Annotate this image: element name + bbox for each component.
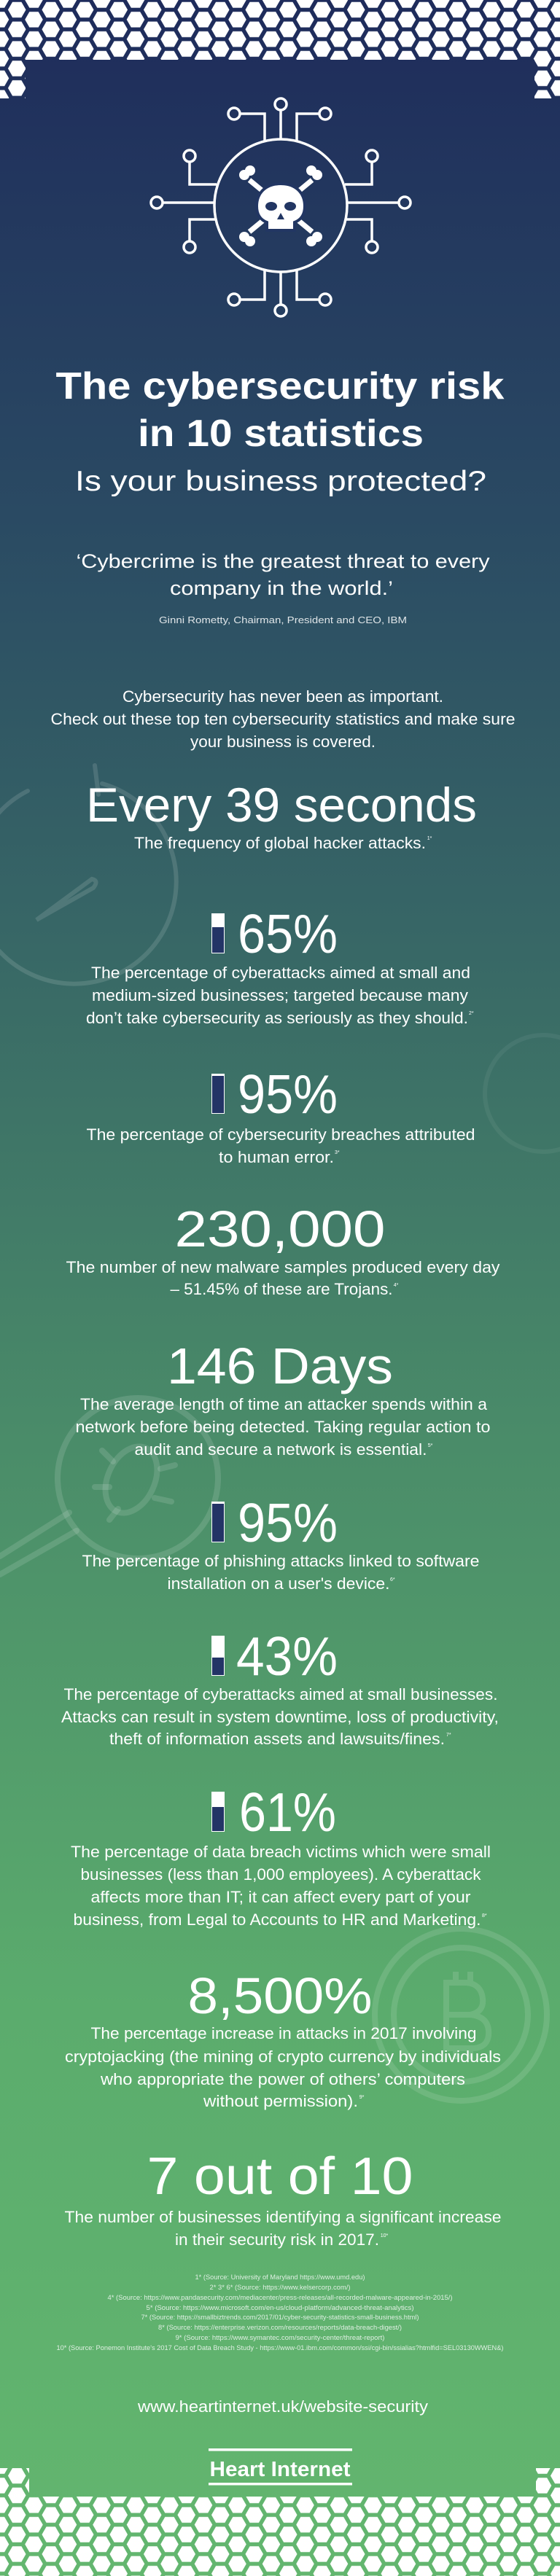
stat: 146 days: 146 Days [167,1338,393,1394]
quote: ‘Cybercrime is the greatest threat to every [76,550,490,572]
stat: 7 out of 10: 7 out of 10 [147,2147,413,2206]
stat: 8,500%: 9* [359,2095,365,2100]
stat: 95% phishing: The percentage of phishing attacks linked to software [82,1552,480,1570]
intro text: your business is covered. [190,733,376,751]
stat: 65%: 65% [238,903,338,964]
stat: 95% human error [86,1063,475,1166]
stat: 95% phishing: installation on a user's device. [168,1574,389,1593]
background icon: bitcoin [375,1929,547,2101]
stat: 95% phishing: 6* [390,1577,395,1582]
stat: 146 days: The average length of time an attacker spends within a [80,1395,488,1413]
website url: www.heartinternet.uk/website-security [137,2397,428,2416]
sources: 5* (Source: https://www.microsoft.com/en-us/cloud-platform/advanced-threat-analytics) [146,2304,414,2312]
stat: 61%: business, from Legal to Accounts to HR and Marketing. [73,1910,481,1929]
intro text: Check out these top ten cybersecurity statistics and make sure [51,710,515,728]
stat: 7 out of 10 [64,2147,502,2249]
stat: 95% human error: 3* [335,1150,340,1155]
stat: 65% [86,903,474,1027]
hexagon pattern: top [0,0,560,102]
logo: Heart Internet [209,2448,352,2486]
stat: 8,500%: The percentage increase in attacks in 2017 involving [90,2024,477,2042]
stat: 95% phishing: 95% [238,1492,338,1553]
stat: 230,000 [66,1201,500,1298]
title [55,365,505,455]
stat: every 39 seconds: The frequency of global hacker attacks. [134,834,426,852]
hexagon pattern: bottom [0,2464,560,2576]
intro text [51,687,515,751]
stat: 65%: don’t take cybersecurity as seriously as they should. [86,1009,468,1027]
stat: 230,000: The number of new malware samples produced every day [66,1258,500,1276]
stat: 230,000: 4* [394,1283,399,1288]
stat: 7 out of 10: The number of businesses identifying a significant increase [64,2208,502,2226]
stat: 43%: Attacks can result in system downtime, loss of productivity, [61,1708,499,1726]
sources: 1* (Source: University of Maryland https://www.umd.edu) [195,2273,365,2282]
stat: 146 days: network before being detected. Taking regular action to [76,1418,490,1436]
stat: 8,500%: who appropriate the power of others’ computers [100,2070,465,2088]
stat: every 39 seconds: 1* [427,836,432,841]
stat: 65%: 2* [469,1011,474,1016]
stat: 61%: 8* [482,1913,487,1919]
subtitle: Is your business protected? [75,466,486,497]
stat: 8,500% [65,1967,501,2110]
sources: 2* 3* 6* (Source: https://www.kelsercorp.com/) [210,2284,350,2292]
stat: 65%: medium-sized businesses; targeted because many [92,986,468,1004]
stat: 61%: The percentage of data breach victims which were small [71,1843,491,1861]
quote: company in the world.’ [170,577,393,599]
stat: 95% human error: The percentage of cybersecurity breaches attributed [86,1125,475,1144]
background icon: magnifier with bug [0,1398,218,1574]
quote [76,550,490,625]
stat: 95% human error: to human error. [219,1148,334,1166]
sources: 10* (Source: Ponemon Institute's 2017 Cost of Data Breach Study - https://www-01.ibm.com/common/ssi/cgi-bin/ssialias?htmlfid=SEL03130WWEN&) [57,2344,503,2352]
stat: every 39 seconds: Every 39 seconds [86,778,477,832]
quote: Ginni Rometty, Chairman, President and CEO, IBM [159,614,407,625]
stat: 230,000: 230,000 [175,1201,385,1257]
title: in 10 statistics [138,413,424,455]
stat: 146 days: audit and secure a network is essential. [134,1440,427,1459]
stat: 61%: businesses (less than 1,000 employees). A cyberattack [80,1865,482,1884]
stat: 61%: 61% [239,1781,336,1843]
stat: 8,500%: 8,500% [188,1967,372,2024]
title: The cybersecurity risk [55,365,505,407]
stat: 43%: 43% [236,1625,338,1687]
background icon: faint circle right [485,1035,560,1152]
intro text: Cybersecurity has never been as important. [122,687,443,706]
stat: 95% human error: 95% [238,1063,338,1125]
stat: 65%: The percentage of cyberattacks aimed at small and [91,964,470,982]
stat: 95% phishing [82,1492,480,1593]
sources: 7* (Source: https://smallbiztrends.com/2017/01/cyber-security-statistics-small-business.html) [141,2314,419,2322]
stat: 43%: theft of information assets and lawsuits/fines. [109,1730,445,1748]
stat: 8,500%: without permission). [203,2092,358,2110]
stat: 43%: The percentage of cyberattacks aimed at small businesses. [64,1685,497,1703]
background icon: clock [0,765,176,984]
logo: Heart Internet: Heart Internet [210,2458,351,2481]
stat: 43%: 7* [446,1733,451,1738]
stat: 8,500%: cryptojacking (the mining of crypto currency by individuals [65,2048,501,2066]
stat: 7 out of 10: 10* [381,2233,389,2239]
sources: 8* (Source: https://enterprise.verizon.com/resources/reports/data-breach-digest/) [158,2324,402,2332]
stat: 146 days: 5* [428,1443,433,1448]
stat: 43% [61,1625,499,1748]
sources [57,2273,503,2352]
icon: skull circuit [151,98,411,316]
stat: 230,000: – 51.45% of these are Trojans. [171,1280,392,1298]
stat: 61% [71,1781,491,1929]
stat: 61%: affects more than IT; it can affect every part of your [90,1888,471,1906]
stat: 146 days [76,1338,490,1459]
sources: 9* (Source: https://www.symantec.com/security-center/threat-report) [175,2334,385,2342]
sources: 4* (Source: https://www.pandasecurity.com/mediacenter/press-releases/all-recorded-malware-appeared-in-2015/) [108,2294,452,2302]
stat: 7 out of 10: in their security risk in 2017. [175,2230,379,2249]
